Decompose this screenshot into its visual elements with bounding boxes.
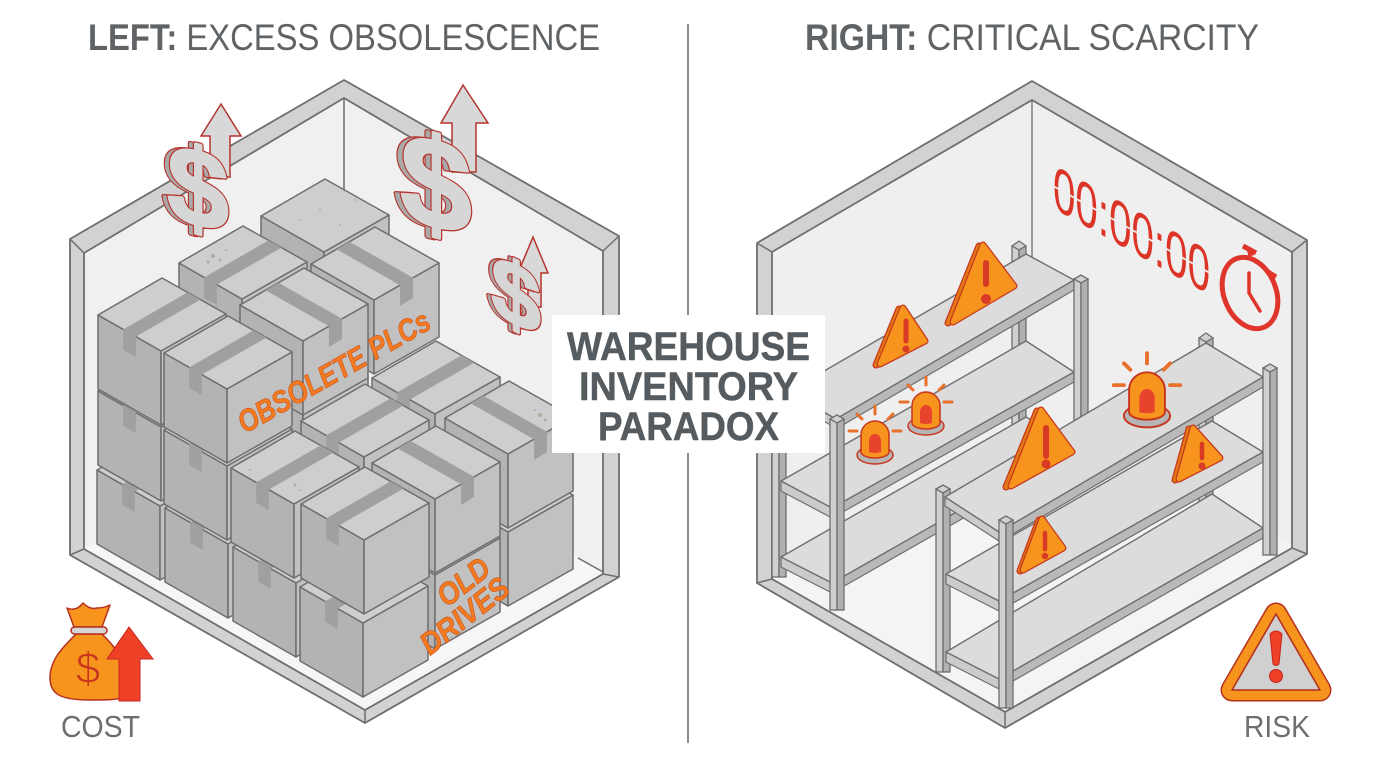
- dollar sign 2: $: [394, 102, 466, 264]
- dollar sign 3: $: [488, 233, 536, 355]
- beacon 3: [1114, 353, 1180, 427]
- title: left: LEFT: EXCESS OBSOLESCENCE: [88, 17, 600, 58]
- shelving unit: front: [936, 333, 1277, 708]
- dollar sign 1: $: [162, 119, 224, 257]
- dollar sign 1: $: [162, 119, 224, 257]
- warning triangle 4: [1175, 428, 1220, 480]
- label: cost: COST: [61, 709, 140, 744]
- beacon 2: [900, 377, 952, 435]
- warning triangle 2: [948, 245, 1014, 323]
- icon: cost money bag with arrow: [50, 603, 153, 701]
- icon: cost money bag with arrow: $: [76, 644, 100, 693]
- dollar sign 3: $: [492, 234, 540, 355]
- label: obsolete PLCs: OBSOLETE PLCs: [231, 303, 436, 440]
- center title: [552, 315, 825, 453]
- arrow: rising cost 2: [441, 85, 488, 172]
- title: right: RIGHT: CRITICAL SCARCITY: [805, 17, 1259, 58]
- dollar sign 3: $: [488, 233, 536, 355]
- panel: right warehouse room: [757, 81, 1307, 728]
- dollar sign 3: $: [492, 234, 540, 355]
- dollar sign 2: $: [400, 103, 472, 264]
- dollar sign 1: $: [167, 119, 229, 257]
- label: old: OLD: [430, 550, 497, 614]
- icon: stopwatch: [1212, 246, 1288, 337]
- countdown timer: 00:00:00: [1053, 152, 1210, 309]
- label: drives: DRIVES: [413, 570, 516, 662]
- arrow: rising cost 3: [518, 237, 548, 307]
- box stack: [97, 179, 573, 697]
- warning triangle 3: [1006, 410, 1072, 487]
- beacon 1: [849, 406, 901, 464]
- center title: PARADOX: [598, 405, 779, 449]
- panel: left warehouse room: [70, 80, 619, 723]
- icon: risk warning triangle: [1232, 614, 1320, 690]
- center title: INVENTORY: [579, 365, 798, 409]
- warning triangle 5: [1020, 519, 1063, 571]
- warning triangle 1: [876, 308, 925, 365]
- icon: rising dollar small arrows and signs: [162, 85, 548, 356]
- center title: WAREHOUSE: [567, 325, 810, 369]
- center divider: [687, 24, 689, 743]
- countdown timer: [1051, 151, 1213, 311]
- shelving unit: back: [772, 241, 1088, 610]
- arrow: rising cost 1: [201, 104, 241, 177]
- dollar sign 2: $: [394, 102, 466, 264]
- label: risk: RISK: [1244, 709, 1310, 744]
- dollar sign 1: $: [167, 119, 229, 257]
- dollar sign 2: $: [400, 103, 472, 264]
